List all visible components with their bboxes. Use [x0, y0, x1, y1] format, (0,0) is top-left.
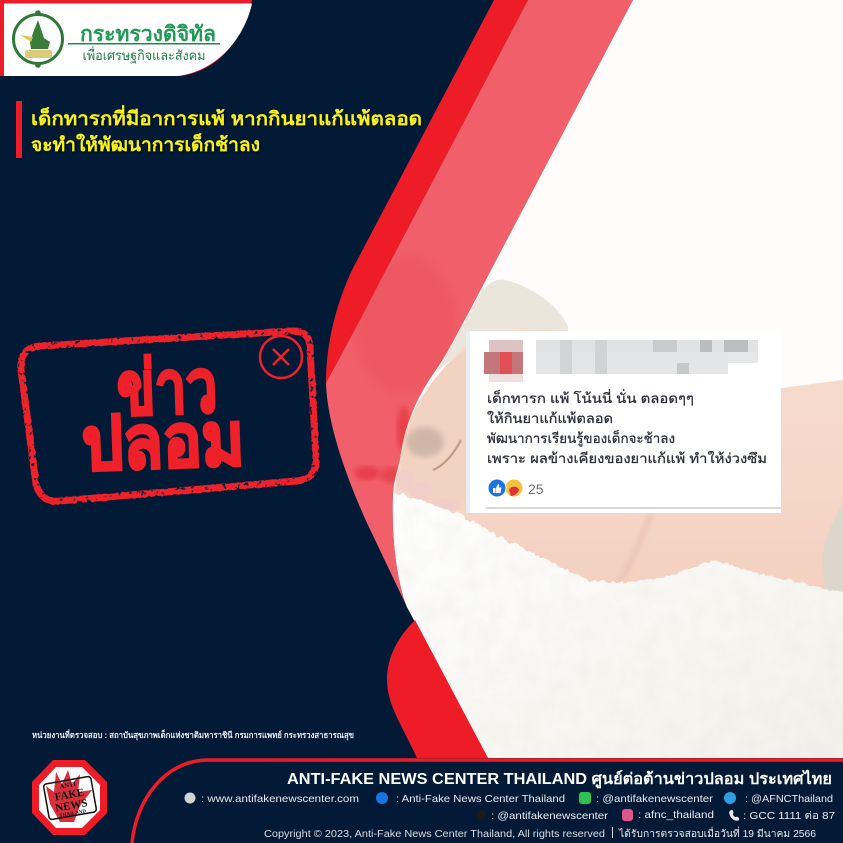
translucent red band — [320, 0, 640, 620]
headline line 2: จะทำให้พัฒนาการเด็กช้าลง — [31, 132, 260, 156]
verification source: หน่วยงานที่ตรวจสอบ : สถาบันสุขภาพเด็กแห่งชาติมหาราชินี กรมการแพทย์ กระทรวงสาธารณสุข — [32, 728, 354, 741]
footer contacts row 1: : @AFNCThailand — [745, 793, 833, 805]
stamp cross icon — [260, 336, 302, 378]
icon: line — [579, 792, 591, 804]
icon: twitter — [724, 792, 736, 804]
knit hat — [436, 280, 568, 372]
body crease — [618, 512, 652, 582]
logo box text: NEWS — [54, 797, 88, 815]
post text: พัฒนาการเรียนรู้ของเด็กจะช้าลง — [487, 429, 675, 447]
footer contacts row 2: : afnc_thailand — [638, 809, 714, 821]
icon: website — [184, 792, 196, 804]
anti-fake news logo — [32, 760, 107, 835]
footer contacts row 2: : GCC 1111 ต่อ 87 — [743, 810, 835, 822]
stamp word 1: ข่าว — [116, 344, 219, 431]
footer contacts row 1 — [184, 792, 833, 805]
post text: ให้กินยาแก้แพ้ตลอด — [487, 410, 613, 426]
footer title: ANTI-FAKE NEWS CENTER THAILAND ศูนย์ต่อต้านข่าวปลอม ประเทศไทย — [287, 769, 832, 790]
reactions — [488, 479, 544, 497]
baby head and body — [393, 328, 843, 610]
diaper knit — [822, 503, 843, 596]
logo panel — [0, 0, 252, 76]
fake news stamp — [21, 331, 316, 501]
baby eye line — [433, 440, 461, 470]
ministry tagline: เพื่อเศรษฐกิจและสังคม — [82, 46, 206, 64]
headline — [16, 101, 422, 158]
baby brow shadow — [406, 427, 444, 457]
footer — [32, 760, 843, 843]
post text — [487, 389, 767, 466]
footer contacts row 1: : @antifakenewscenter — [596, 793, 714, 805]
baby head shading — [402, 349, 466, 468]
footer contacts row 1: : Anti-Fake News Center Thailand — [396, 793, 565, 805]
baby photo — [380, 0, 843, 775]
blurred name — [536, 340, 758, 374]
logo box text: ANTI — [59, 781, 77, 791]
icon: tiktok — [476, 810, 486, 820]
red corner shape — [387, 620, 488, 758]
blurred avatar — [484, 340, 523, 382]
facebook post card — [466, 331, 781, 513]
hat texture in band — [353, 255, 457, 395]
red diagonal strip — [326, 0, 528, 383]
logo box text: FAKE — [54, 787, 85, 804]
footer contacts row 2: : @antifakenewscenter — [491, 810, 609, 822]
blanket — [380, 490, 843, 775]
post text: เด็กทารก แพ้ โน้นนี่ นั่น ตลอดๆๆ — [487, 389, 694, 406]
footer contacts row 1: : www.antifakenewscenter.com — [201, 793, 359, 805]
post text: เพราะ ผลข้างเคียงของยาแก้แพ้ ทำให้ง่วงซึม — [487, 450, 767, 466]
icon: phone — [729, 810, 739, 821]
footer contacts row 2 — [476, 809, 835, 822]
logo box text: THAILAND — [59, 809, 87, 819]
icon: facebook — [376, 792, 388, 804]
ministry name: กระทรวงดิจิทัล — [80, 23, 216, 46]
stamp frame — [21, 331, 316, 501]
baby fingers — [396, 471, 401, 484]
logo hand — [46, 770, 92, 822]
icon: instagram — [622, 809, 633, 821]
stamp word 2: ปลอม — [81, 397, 246, 486]
copyright: Copyright © 2023, Anti-Fake News Center Thailand, All rights reserved — [264, 829, 605, 840]
logo box text — [43, 776, 97, 821]
ministry emblem — [14, 10, 62, 68]
reaction count: 25 — [528, 481, 544, 497]
review date: ได้รับการตรวจสอบเมื่อวันที่ 19 มีนาคม 2566 — [618, 826, 816, 840]
headline line 1: เด็กทารกที่มีอาการแพ้ หากกินยาแก้แพ้ตลอด — [31, 105, 422, 130]
